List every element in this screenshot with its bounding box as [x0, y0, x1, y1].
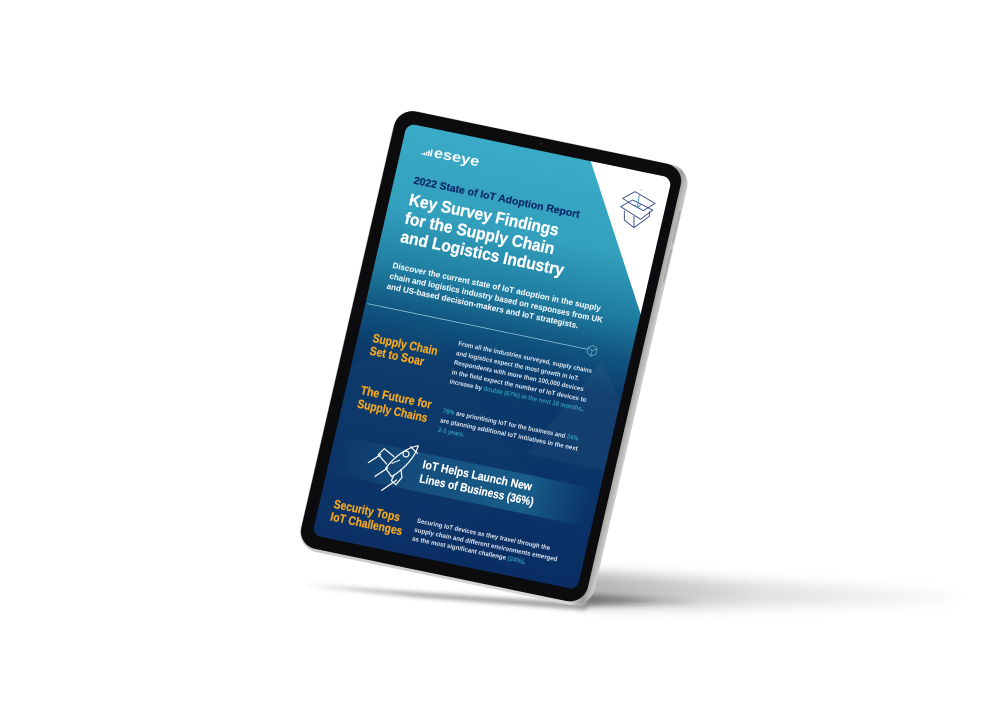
text: supply chain: From all the industries surveyed, supply chains — [458, 341, 593, 375]
background facets — [312, 308, 561, 576]
report label: 2022 State of IoT Adoption Report — [412, 176, 581, 221]
icon: open box — [621, 189, 655, 228]
text: security — [411, 518, 560, 572]
side buttons — [663, 210, 681, 283]
main title: and Logistics Industry — [399, 227, 567, 280]
intro paragraph: Discover the current state of IoT adoption in the supply — [392, 261, 602, 313]
logo — [421, 142, 481, 169]
heading: future — [356, 383, 433, 425]
text: supply chain: in the field expect the number of IoT devices to — [451, 369, 587, 404]
tablet infographic mockup — [300, 111, 917, 614]
white corner triangle — [590, 161, 670, 314]
divider box icon — [586, 344, 598, 357]
heading: supply chain: Supply Chain — [371, 331, 439, 358]
logo: eseye — [432, 144, 481, 169]
band title: IoT Helps Launch New — [421, 457, 534, 494]
text: supply chain — [449, 341, 594, 413]
camera — [540, 143, 542, 145]
text: security: as the most significant challenge (24%). — [411, 536, 526, 566]
heading: supply chain: Set to Soar — [368, 344, 426, 369]
faint triangle — [526, 350, 631, 471]
text: future — [437, 408, 581, 462]
text: supply chain: and logistics expect the most growth in IoT. — [455, 350, 580, 383]
tablet silver frame — [296, 107, 692, 609]
intro paragraph: chain and logistics industry based on responses from UK — [389, 272, 604, 325]
band title: Lines of Business (36%) — [418, 471, 535, 509]
screen background — [312, 123, 672, 590]
divider line — [367, 304, 587, 349]
main title — [399, 190, 575, 280]
text: supply chain: Respondents with more than 100,000 devices — [453, 360, 585, 393]
heading: future: The Future for — [359, 383, 433, 412]
text: future: 2-3 years. — [437, 427, 465, 439]
text: security: Securing IoT devices as they travel through the — [416, 518, 551, 552]
heading: supply chain — [368, 331, 439, 371]
icon: rocket — [368, 446, 418, 490]
heading: future: Supply Chains — [356, 397, 429, 425]
main title: Key Survey Findings — [407, 190, 561, 240]
intro paragraph: and US-based decision-makers and IoT strategists. — [386, 282, 579, 330]
ground shadow — [305, 572, 955, 610]
tablet — [296, 107, 692, 609]
text: supply chain: increase by double (67%) in the next 18 months. — [449, 378, 584, 413]
main title: for the Supply Chain — [403, 209, 556, 258]
heading: security — [329, 497, 407, 538]
heading: security: IoT Challenges — [329, 510, 404, 538]
text: future: are planning additional IoT initiatives in the next — [439, 417, 579, 453]
feature band — [358, 442, 580, 524]
tablet black bezel — [297, 108, 685, 605]
text: security: supply chain and different environments emerged — [414, 527, 558, 563]
screen — [312, 121, 674, 590]
text: future: 78% are prioritising IoT for the business and 24% — [442, 408, 579, 443]
heading: security: Security Tops — [333, 497, 402, 524]
